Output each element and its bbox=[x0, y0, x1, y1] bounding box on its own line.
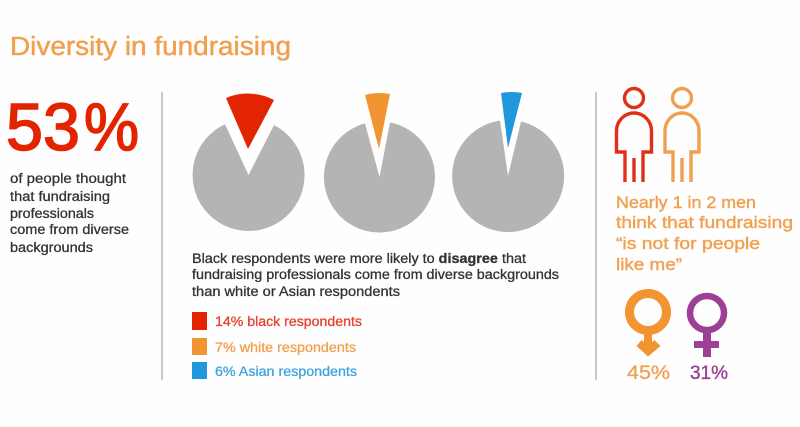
icon: female symbol bbox=[690, 296, 724, 357]
panel: headline statistic bbox=[6, 90, 139, 255]
icon: red person bbox=[616, 88, 652, 182]
gender callout text: Nearly 1 in 2 men bbox=[616, 193, 756, 212]
legend bbox=[192, 312, 362, 379]
statistic description: come from diverse bbox=[10, 222, 129, 237]
legend item: black respondents bbox=[192, 312, 362, 330]
chart description: than white or Asian respondents bbox=[192, 284, 400, 299]
chart description bbox=[192, 251, 559, 299]
statistic description: backgrounds bbox=[10, 240, 93, 255]
panel: respondents pie charts bbox=[192, 92, 564, 379]
legend item: white respondents: 7% white respondents bbox=[215, 340, 356, 355]
panel: gender bbox=[616, 88, 793, 384]
chart description: Black respondents were more likely to disagree that bbox=[192, 251, 526, 266]
chart description: fundraising professionals come from diverse backgrounds bbox=[192, 267, 559, 282]
legend item: black respondents: 14% black respondents bbox=[215, 314, 362, 329]
gender callout text: like me” bbox=[616, 255, 682, 274]
percent sign: % bbox=[84, 90, 139, 165]
statistic description: professionals bbox=[10, 206, 94, 221]
men percentage: 45% bbox=[627, 362, 670, 384]
statistic description: of people thought bbox=[10, 171, 126, 186]
icon: male symbol bbox=[630, 294, 666, 356]
legend item: Asian respondents: 6% Asian respondents bbox=[215, 364, 357, 379]
big number: 53%: 53 bbox=[6, 90, 80, 165]
gender callout text bbox=[616, 193, 793, 274]
title: Diversity in fundraising bbox=[10, 33, 291, 61]
gender callout text: “is not for people bbox=[616, 234, 760, 253]
statistic description bbox=[10, 171, 129, 255]
statistic description: that fundraising bbox=[10, 189, 110, 204]
pie chart: Asian respondents bbox=[452, 92, 564, 232]
pie chart: black respondents bbox=[193, 94, 305, 231]
icon: orange person bbox=[665, 88, 699, 182]
women percentage: 31% bbox=[690, 362, 728, 384]
gender callout text: think that fundraising bbox=[616, 213, 793, 232]
pie chart: white respondents bbox=[324, 93, 435, 232]
